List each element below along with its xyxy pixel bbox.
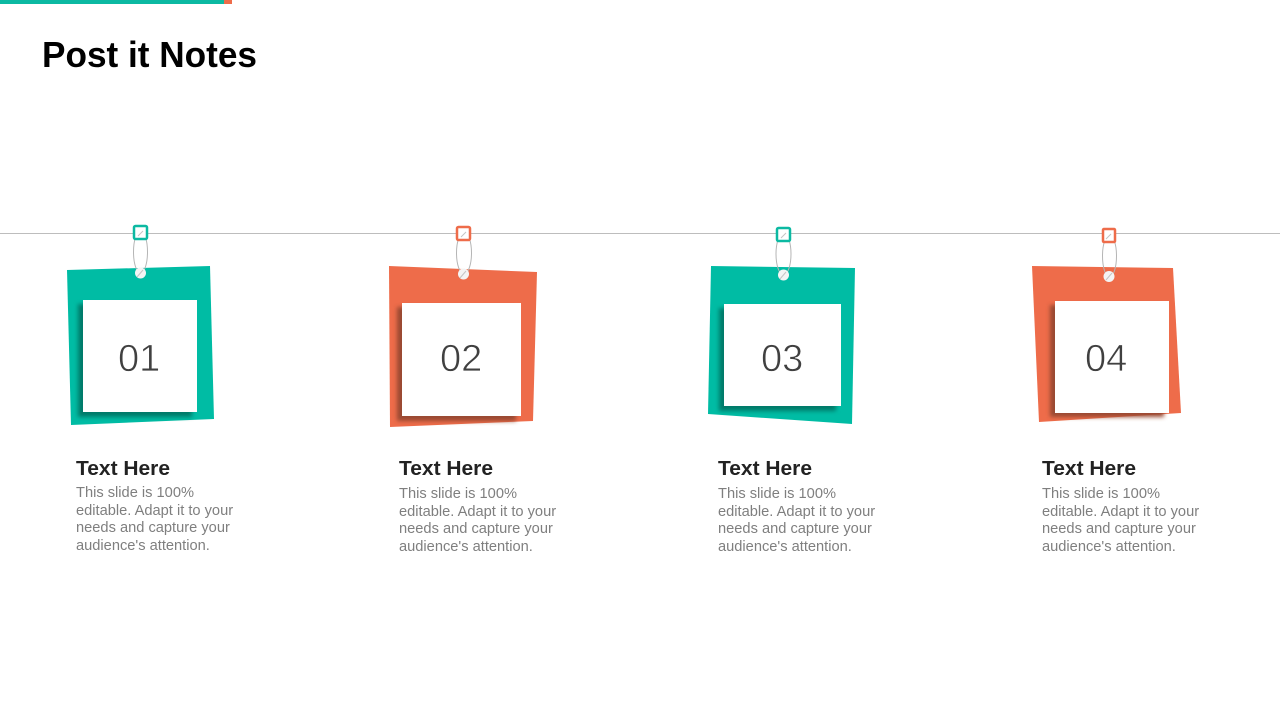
hanging line bbox=[0, 232, 1280, 234]
note 02 body text: needs and capture your bbox=[399, 521, 553, 537]
note 04 number: 04 bbox=[1085, 338, 1127, 380]
note 02 clip bbox=[456, 227, 472, 280]
note 02 paper bbox=[389, 266, 537, 427]
note 04 bbox=[1032, 229, 1199, 555]
note 01 heading: Text Here bbox=[76, 457, 170, 480]
note 03 body text: audience's attention. bbox=[718, 539, 852, 555]
note 04 heading: Text Here bbox=[1042, 457, 1136, 480]
note 02 body text: editable. Adapt it to your bbox=[399, 504, 556, 520]
note 01 clip bbox=[134, 226, 148, 278]
note 03 shadow bbox=[719, 308, 836, 411]
note 02 number: 02 bbox=[440, 338, 482, 380]
note 02 body text: This slide is 100% bbox=[399, 486, 517, 502]
note 03 heading: Text Here bbox=[718, 457, 812, 480]
note 04 paper bbox=[1032, 266, 1181, 422]
note 01 body text: audience's attention. bbox=[76, 538, 210, 554]
note 03 body text: needs and capture your bbox=[718, 521, 872, 537]
note 03 paper bbox=[708, 266, 855, 424]
note 02 shadow bbox=[397, 307, 516, 421]
note 04 shadow bbox=[1050, 305, 1164, 417]
note 01 bbox=[67, 226, 233, 554]
note 01 paper bbox=[67, 266, 214, 425]
note 01 body text: editable. Adapt it to your bbox=[76, 503, 233, 519]
note 02 body text: audience's attention. bbox=[399, 539, 533, 555]
note 04 clip bbox=[1102, 229, 1116, 282]
title: Post it Notes bbox=[42, 34, 257, 75]
note 03 bbox=[708, 228, 875, 555]
note 03 number: 03 bbox=[761, 338, 803, 380]
note 01 body text: This slide is 100% bbox=[76, 485, 194, 501]
note 01 body text: needs and capture your bbox=[76, 520, 230, 536]
note 04 body text: editable. Adapt it to your bbox=[1042, 504, 1199, 520]
note 04 body text: This slide is 100% bbox=[1042, 486, 1160, 502]
note 03 body text: editable. Adapt it to your bbox=[718, 504, 875, 520]
note 04 body text: audience's attention. bbox=[1042, 539, 1176, 555]
note 04 body text: needs and capture your bbox=[1042, 521, 1196, 537]
note 04 white card bbox=[1055, 301, 1169, 413]
note 03 clip bbox=[776, 228, 791, 280]
note 02 heading: Text Here bbox=[399, 457, 493, 480]
note 03 white card bbox=[724, 304, 841, 406]
note 02 white card bbox=[402, 303, 521, 416]
note 01 white card bbox=[83, 300, 197, 412]
note 01 number: 01 bbox=[118, 338, 160, 380]
note 01 shadow bbox=[78, 304, 192, 417]
top accent bar bbox=[0, 0, 232, 4]
note 02 bbox=[389, 227, 556, 555]
note 03 body text: This slide is 100% bbox=[718, 486, 836, 502]
